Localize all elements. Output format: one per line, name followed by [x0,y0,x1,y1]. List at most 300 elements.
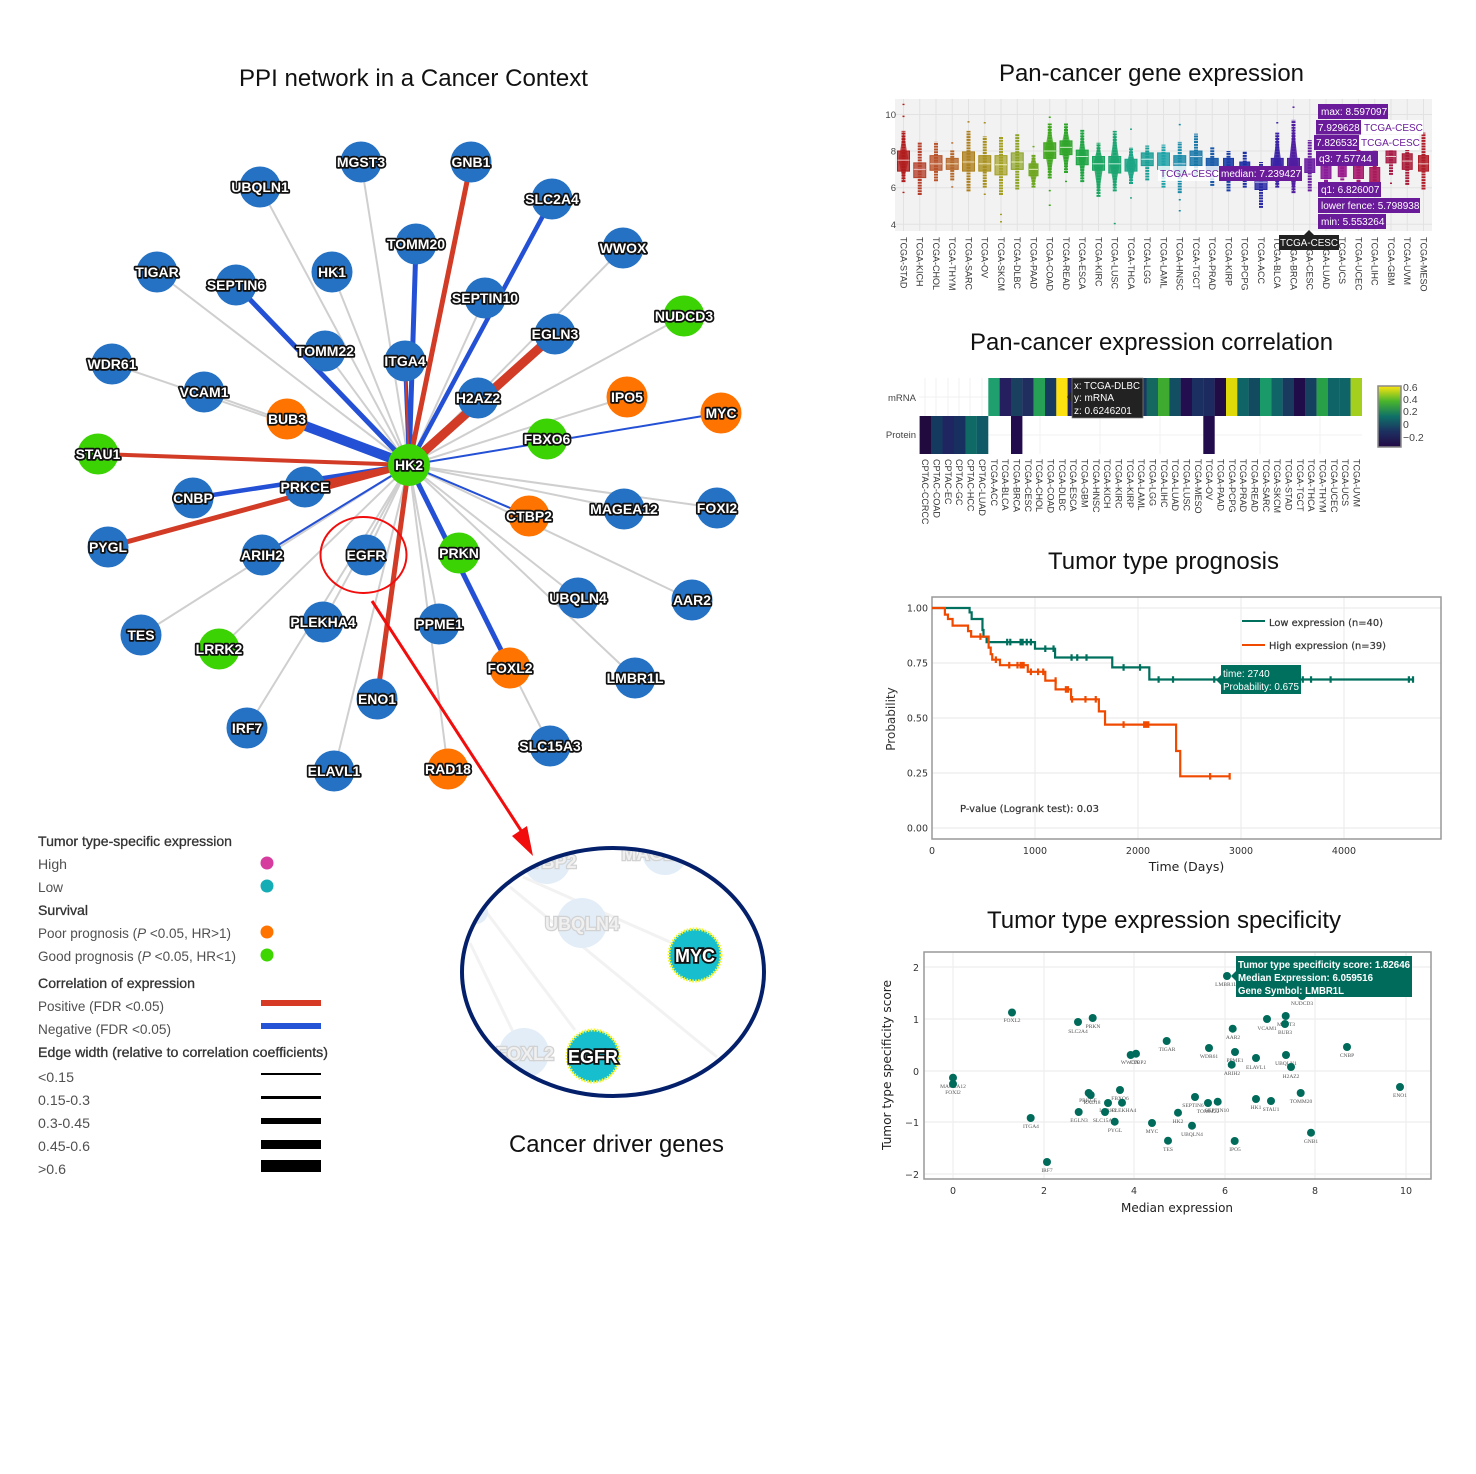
scatter gene labels: LRRK2 [1099,1108,1117,1114]
legend heading: correlation of expression: Correlation of expression [38,975,195,991]
node: PLEKHA4 [290,602,356,642]
legend item: negative: Negative (FDR <0.05) [38,1021,171,1037]
legend item: good prognosis: Good prognosis (P <0.05, HR<1) [38,948,236,964]
node: MYC: MYC [705,405,737,421]
scatter gene labels: HK1 [1251,1105,1262,1111]
scatter tooltip: Median Expression: 6.059516 [1238,973,1373,984]
heatmap column labels: TCGA-ACC [989,459,999,506]
node: MGST3 [337,142,385,182]
x axis cancer labels: TCGA-COAD [1045,237,1055,292]
heatmap column labels: TCGA-TGCT [1295,459,1305,512]
box plot hover tooltips: TCGA-CESC [1361,138,1420,149]
node: VCAM1: VCAM1 [179,384,229,400]
scatter gene labels: MGST3 [1277,1022,1295,1028]
scatter y axis labels: 1 [913,1015,919,1026]
x axis cancer labels: TCGA-PCPG [1240,237,1250,291]
x axis cancer labels: TCGA-UVM [1402,237,1412,285]
node: RAD18 [425,748,471,790]
survival y axis labels: 1.00 [907,604,928,614]
survival frame [932,597,1441,839]
heatmap column labels: TCGA-STAD [1283,459,1293,511]
heatmap column labels: CPTAC-HCC [965,459,975,512]
heatmap column labels [920,459,1361,525]
node: WDR61: WDR61 [87,356,137,372]
infographic canvas [38,64,1442,1214]
node: EGLN3 [532,314,579,354]
scatter gene labels: TOMM22 [1197,1109,1220,1115]
legend item: edge over 0.6 [38,1160,321,1177]
heatmap column labels: TCGA-PAAD [1215,459,1225,511]
node: CTBP2: CTBP2 [506,508,552,524]
node: LRRK2 [196,628,243,670]
node: FOXI2: FOXI2 [697,500,737,516]
box plot hover tooltips: q3: 7.57744 [1319,154,1372,165]
node: IRF7: IRF7 [232,720,262,736]
scatter gene labels: BUB3 [1278,1030,1292,1036]
scatter x axis labels: 4 [1131,1186,1137,1197]
node: UBQLN4: UBQLN4 [549,590,607,606]
colorbar: −0.2 [1403,432,1424,444]
survival x axis labels: 4000 [1332,846,1356,857]
heatmap column labels: TCGA-LIHC [1159,459,1169,508]
x axis cancer labels: TCGA-LIHC [1370,237,1380,286]
scatter y axis labels: 0 [913,1067,919,1078]
node: VCAM1 [179,372,229,412]
node: H2AZ2 [456,378,500,418]
scatter x axis title: Median expression [1121,1200,1233,1215]
survival y axis labels: 0.50 [907,714,928,724]
x axis cancer labels: TCGA-LGG [1142,237,1152,284]
y axis ticks: 8 [891,146,896,158]
scatter y axis labels [905,963,919,1181]
heatmap column labels: TCGA-LGG [1147,459,1157,506]
heatmap row labels: mRNA [888,393,917,404]
survival tooltip: Probability: 0.675 [1223,682,1299,693]
scatter gene labels: MAGEA12 [940,1084,966,1090]
title: tumor type prognosis: Tumor type prognosis [1048,548,1279,575]
x axis cancer labels: TCGA-GBM [1386,237,1396,286]
node: GNB1: GNB1 [452,154,491,170]
scatter points [949,972,1404,1166]
lens: cancer driver genes magnifier: UBQLN4 [545,914,619,934]
chart: survival curves [884,597,1441,874]
title: pan-cancer expression correlation: Pan-cancer expression correlation [970,329,1333,356]
y axis ticks: 4 [891,220,896,231]
node: PPME1 [415,604,463,644]
x axis cancer labels: TCGA-SKCM [996,237,1006,291]
scatter gene labels: TES [1163,1147,1173,1153]
node: UBQLN4 [549,578,607,618]
colorbar: 0.4 [1403,394,1418,406]
node: ARIH2 [241,534,283,576]
x axis cancer labels: TCGA-KICH [915,237,925,286]
scatter gene labels: SLC15A3 [1093,1118,1115,1124]
scatter x axis labels: 2 [1041,1186,1047,1197]
scatter gene labels: PRKCE [1079,1098,1098,1104]
scatter gene labels: LMBR1L [1215,982,1237,988]
node: HK1 [312,252,352,292]
scatter gene labels: CTBP2 [1130,1060,1146,1066]
node: FBXO6 [524,418,571,460]
node: UBQLN1: UBQLN1 [231,179,289,195]
box plot hover tooltips: TCGA-CESC [1160,169,1219,180]
node: ITGA4 [384,340,426,382]
scatter gene labels: RAD18 [1083,1100,1101,1106]
scatter gene labels: PLEKHA4 [1112,1108,1136,1114]
node: SLC2A4 [525,178,579,220]
legend item: positive: Positive (FDR <0.05) [38,998,164,1014]
legend [38,833,328,1177]
scatter gene labels: GNB1 [1304,1139,1318,1145]
node: HK2 hub: HK2 [395,457,423,473]
node: FBXO6: FBXO6 [524,431,571,447]
heatmap column labels: TCGA-OV [1204,459,1214,500]
node: SEPTIN10: SEPTIN10 [452,290,518,306]
x axis cancer labels: TCGA-PAAD [1028,237,1038,289]
node: IRF7 [226,708,268,748]
scatter gene labels: HK2 [1173,1119,1184,1125]
scatter gene labels: SEPTIN6 [1182,1103,1204,1109]
node: MAGEA12 [590,488,658,530]
lens: EGFR driver node: EGFR [568,1047,618,1067]
heatmap tooltip [1067,378,1143,418]
box plot hover tooltips: max: 8.597097 [1321,107,1388,118]
colorbar: 0.2 [1403,406,1418,418]
box plot hover tooltips: lower fence: 5.798938 [1321,201,1420,212]
heatmap column labels: TCGA-THCA [1306,459,1316,512]
heatmap tooltip: z: 0.6246201 [1074,406,1132,417]
low expression curve [932,608,1414,683]
x axis cancer labels: TCGA-STAD [898,237,908,289]
node: PRKCE [280,466,330,508]
survival y axis labels: 0.00 [907,824,928,834]
node: FOXL2 [487,648,533,688]
scatter x axis labels: 0 [950,1186,956,1197]
node: IPO5 [606,376,648,418]
node: GNB1 [450,142,492,182]
survival x axis labels: 3000 [1229,846,1253,857]
heatmap column labels: TCGA-LAML [1136,459,1146,511]
box plot hover tooltips: 7.929628 [1318,123,1360,134]
y axis ticks [885,110,896,231]
node: ELAVL1 [308,750,361,792]
heatmap column labels: CPTAC-CCRCC [920,459,930,525]
node: ENO1 [356,678,398,720]
x axis cancer labels: TCGA-SARC [963,237,973,291]
legend item: high: High [38,856,67,872]
survival x axis labels: 1000 [1023,846,1047,857]
lens: MYC driver node [669,929,721,981]
heatmap column labels: TCGA-MESO [1193,459,1203,514]
node: PRKN [438,532,480,574]
x axis cancer labels: TCGA-UCS [1337,237,1347,284]
x axis cancer labels: TCGA-LUAD [1321,237,1331,290]
heatmap column labels: TCGA-UVM [1351,459,1361,507]
heatmap column labels: TCGA-GBM [1079,459,1089,508]
scatter x axis labels: 6 [1222,1186,1228,1197]
heatmap column labels: TCGA-SKCM [1272,459,1282,513]
scatter gene labels: SEPTIN10 [1205,1108,1229,1114]
x axis cancer labels: TCGA-LAML [1158,237,1168,289]
heatmap column labels: TCGA-BLCA [1000,459,1010,511]
node: ELAVL1: ELAVL1 [308,763,361,779]
heatmap column labels: TCGA-KICH [1102,459,1112,508]
scatter frame [924,952,1431,1179]
survival y axis labels: 0.25 [907,768,928,780]
node: TES: TES [127,627,155,643]
heatmap column labels: TCGA-PCPG [1227,459,1237,513]
logrank p-value: P-value (Logrank test): 0.03 [960,804,1099,815]
node: SEPTIN6 [207,264,265,306]
x axis cancer labels: TCGA-TGCT [1191,237,1201,290]
arrow: EGFR to lens [372,601,533,856]
box plot hover tooltips: q1: 6.826007 [1321,185,1380,196]
heatmap column labels: TCGA-UCEC [1329,459,1339,513]
node: PYGL [88,526,128,568]
node: TES [120,614,162,656]
heatmap column labels: TCGA-BRCA [1011,459,1021,512]
survival y axis labels [907,604,928,834]
node: NUDCD3: NUDCD3 [655,308,713,324]
survival x axis labels: 0 [929,846,935,857]
node: SLC15A3: SLC15A3 [519,738,581,754]
scatter gene labels: PYGL [1108,1128,1123,1134]
x axis cancer labels: TCGA-KIRP [1223,237,1233,286]
scatter tooltip: Tumor type specificity score: 1.82646 [1238,960,1410,971]
scatter gene labels: WWOX [1121,1060,1139,1066]
x axis cancer labels: TCGA-KIRC [1093,237,1103,287]
lens: MYC driver node: MYC [675,946,715,966]
colorbar: 0 [1403,419,1409,431]
node: HK1: HK1 [318,264,346,280]
network edges [98,162,721,771]
node: LMBR1L: LMBR1L [607,670,664,686]
heatmap column labels: TCGA-ESCA [1068,459,1078,512]
scatter gene labels: TIGAR [1159,1047,1176,1053]
node: WDR61 [87,344,137,384]
x axis cancer labels: TCGA-BRCA [1288,237,1298,290]
legend item: low [38,879,274,895]
heatmap column labels: TCGA-HNSC [1091,459,1101,513]
node: LRRK2: LRRK2 [196,641,243,657]
node: SLC2A4: SLC2A4 [525,191,579,207]
box plot hover tooltips: TCGA-CESC [1364,123,1423,134]
heatmap tooltip: x: TCGA-DLBC [1074,381,1140,392]
box series by cancer type [898,104,1428,224]
scatter gene labels: NUDCD3 [1291,1001,1313,1007]
lens: cancer driver genes magnifier: FOXL2 [496,1044,554,1064]
x axis cancer labels: TCGA-HNSC [1175,237,1185,291]
scatter gene labels: AAR2 [1226,1035,1240,1041]
node: PRKN: PRKN [439,545,479,561]
node: ITGA4: ITGA4 [384,353,426,369]
node: HK2 hub [388,444,430,486]
survival x axis labels: 2000 [1126,846,1150,857]
scatter gene labels: VCAM1 [1257,1026,1277,1032]
survival legend [1242,618,1386,652]
heatmap column labels: CPTAC-LUAD [977,459,987,516]
node: UBQLN1 [231,166,289,208]
heatmap column labels: TCGA-LUAD [1170,459,1180,512]
node: EGFR: EGFR [347,547,385,563]
x axis cancer labels: TCGA-BLCA [1272,237,1282,289]
scatter gene labels: PRKN [1086,1024,1100,1030]
survival legend: Low expression (n=40) [1269,618,1383,629]
survival tooltip [1216,665,1301,694]
title: pan-cancer gene expression: Pan-cancer gene expression [999,60,1304,87]
title: PPI network: PPI network in a Cancer Context [239,65,588,92]
x axis cancer labels: TCGA-THYM [947,237,957,290]
scatter gene labels: TOMM20 [1290,1099,1313,1105]
legend item: edge under 0.15: <0.15 [38,1069,74,1085]
node: EGLN3: EGLN3 [532,326,579,342]
node: EGFR [346,534,386,576]
node: TOMM20: TOMM20 [387,236,445,252]
x axis cancer labels: TCGA-READ [1061,237,1071,291]
legend item: high [38,856,274,872]
x axis cancer labels: TCGA-MESO [1418,237,1428,292]
scatter gene labels: PPME1 [1226,1058,1244,1064]
heatmap column labels: TCGA-THYM [1317,459,1327,512]
node: STAU1: STAU1 [76,446,121,462]
heatmap column labels: TCGA-UCS [1340,459,1350,506]
scatter gene labels: FBXO6 [1111,1096,1129,1102]
legend item: negative [38,1021,321,1037]
scatter gene labels: CNBP [1340,1053,1354,1059]
legend item: low: Low [38,879,64,895]
node: AAR2: AAR2 [673,592,711,608]
node: BUB3 [266,398,308,440]
x axis cancer labels: TCGA-PRAD [1207,237,1217,291]
x axis cancer labels: TCGA-UCEC [1353,237,1363,291]
high expression curve [932,608,1230,780]
x axis cancer labels: TCGA-LUSC [1110,237,1120,290]
node: FOXL2: FOXL2 [487,660,533,676]
legend item: edge 0.3-0.45 [38,1115,321,1131]
heatmap column labels: TCGA-CHOL [1034,459,1044,512]
node: RAD18: RAD18 [425,761,471,777]
legend item: edge 0.15-0.3 [38,1092,321,1108]
heatmap column labels: CPTAC-GC [954,459,964,506]
node: WWOX: WWOX [600,240,647,256]
heatmap column labels: TCGA-KIRC [1113,459,1123,509]
scatter gene labels: MYC [1146,1129,1159,1135]
node: CTBP2 [506,496,552,536]
heatmap tooltip: y: mRNA [1074,393,1114,404]
heatmap column labels: TCGA-SARC [1261,459,1271,513]
box plot hover tooltips [1158,104,1423,250]
node: FOXI2 [696,488,738,528]
heatmap column labels: TCGA-PRAD [1238,459,1248,513]
x axis cancer labels: TCGA-OV [980,237,990,278]
scatter gene labels: ARIH2 [1224,1071,1240,1077]
scatter y axis labels: −1 [905,1118,919,1129]
node: MYC [700,392,742,434]
node: PRKCE: PRKCE [280,479,330,495]
scatter gene labels: ENO1 [1393,1093,1407,1099]
heatmap column labels: TCGA-CESC [1023,459,1033,513]
node: BUB3: BUB3 [268,411,306,427]
node: CNBP: CNBP [173,490,213,506]
survival tooltip: time: 2740 [1223,669,1270,680]
legend item: positive [38,998,321,1014]
colorbar [1378,382,1424,447]
heatmap column labels: TCGA-KIRP [1125,459,1135,508]
node: ARIH2: ARIH2 [241,547,283,563]
node: AAR2 [672,580,712,620]
heatmap column labels: CPTAC-COAD [931,459,941,518]
scatter y axis labels: 2 [913,963,919,974]
legend item: edge 0.15-0.3: 0.15-0.3 [38,1092,90,1108]
scatter gene labels: WDR61 [1200,1054,1218,1060]
node: TIGAR: TIGAR [135,264,179,280]
scatter gene labels: FOXL2 [1003,1018,1021,1024]
node: PYGL: PYGL [89,539,128,555]
lens: cancer driver genes magnifier: CTBP2 [517,852,577,872]
chart: correlation heatmap [886,378,1424,525]
survival legend: High expression (n=39) [1269,641,1386,652]
scatter gene labels: IPO5 [1229,1147,1241,1153]
survival x axis labels [929,846,1356,857]
node: TOMM22: TOMM22 [296,343,354,359]
node: SLC15A3 [519,726,581,766]
scatter gene labels: EGLN3 [1070,1118,1088,1124]
scatter y axis labels: −2 [905,1170,919,1181]
node: TOMM20 [387,224,445,264]
x axis cancer labels [898,237,1428,292]
scatter gene labels: ELAVL1 [1246,1065,1266,1071]
scatter gene labels: SLC2A4 [1068,1029,1088,1035]
legend item: edge 0.3-0.45: 0.3-0.45 [38,1115,90,1131]
node: SEPTIN10 [452,278,518,318]
y axis ticks: 6 [891,183,896,194]
node: NUDCD3 [655,296,713,336]
survival y axis labels: 0.75 [907,658,928,670]
scatter gene labels: STAU1 [1263,1107,1280,1113]
box plot hover tooltips: min: 5.553264 [1321,217,1385,228]
node: CNBP [172,478,214,518]
lens: EGFR driver node [567,1030,619,1082]
heatmap mRNA row [988,378,1362,416]
x axis cancer labels: TCGA-CESC [1305,237,1315,291]
legend heading: survival: Survival [38,902,88,918]
box plot hover tooltips: TCGA-CESC [1280,238,1338,249]
node: IPO5: IPO5 [611,389,643,405]
title: tumor type expression specificity: Tumor type expression specificity [987,907,1341,934]
node: PPME1: PPME1 [415,616,463,632]
node: TOMM22 [296,330,354,372]
node: PLEKHA4: PLEKHA4 [290,614,356,630]
y axis ticks: 10 [885,110,896,121]
chart: specificity scatter plot [880,952,1431,1215]
legend item: edge over 0.6: >0.6 [38,1161,66,1177]
x axis cancer labels: TCGA-DLBC [1012,237,1022,290]
scatter gene labels [940,982,1407,1174]
highlight circle around EGFR [320,517,406,593]
heatmap protein row [920,416,1215,454]
scatter gene labels: H2AZ2 [1283,1074,1300,1080]
heatmap column labels: CPTAC-EC [943,459,953,505]
scatter x axis labels: 10 [1400,1186,1412,1197]
node: STAU1 [76,434,121,474]
scatter x axis labels [950,1186,1412,1197]
scatter tooltip [1231,956,1412,997]
network nodes [76,142,742,792]
box plot hover tooltips: 7.826532 [1316,138,1358,149]
legend item: poor prognosis: Poor prognosis (P <0.05, HR>1) [38,925,231,941]
heatmap row labels [886,393,917,441]
lens: cancer driver genes magnifier: MAGEA12 [621,844,709,864]
